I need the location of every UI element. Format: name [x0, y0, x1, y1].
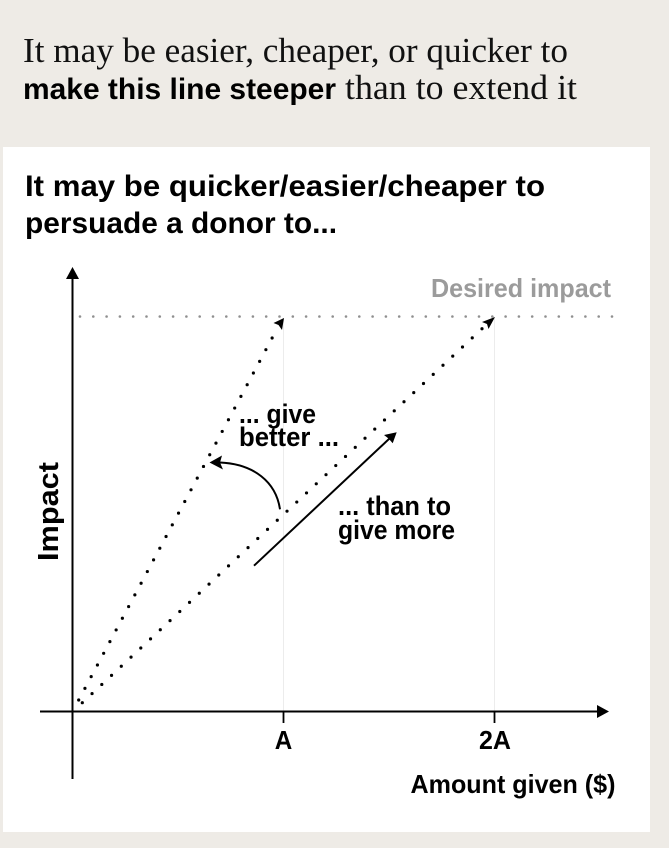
- y axis with arrow: [66, 267, 79, 779]
- arrow: give better: [210, 456, 280, 509]
- tick label 2A: 2A: [479, 725, 511, 755]
- label: than to give more: [338, 491, 455, 545]
- shallow dotted line: [82, 317, 495, 703]
- y axis label: Impact: [33, 462, 65, 561]
- chart heading: [25, 170, 545, 240]
- desired impact label: Desired impact: [431, 273, 611, 303]
- title: than to extend it: [345, 68, 577, 107]
- label: than to give more: give more: [338, 515, 455, 545]
- label: give better: [239, 399, 339, 452]
- arrow: give more: [254, 432, 397, 566]
- reference lines at A and 2A: [284, 318, 494, 711]
- chart heading: It may be quicker/easier/cheaper to: [25, 170, 545, 203]
- x axis with arrow: [40, 705, 609, 723]
- panel: chart card: [3, 147, 650, 832]
- desired impact dotted line: [80, 315, 615, 318]
- title: [23, 31, 577, 107]
- title: make this line steeper: [23, 73, 336, 106]
- title: It may be easier, cheaper, or quicker to: [23, 31, 568, 70]
- chart heading: persuade a donor to...: [25, 207, 337, 240]
- tick label A: A: [275, 725, 292, 755]
- label: give better: ... give: [239, 399, 316, 429]
- x axis label: Amount given ($): [410, 769, 616, 799]
- steep dotted line: [79, 318, 284, 700]
- label: than to give more: ... than to: [338, 491, 451, 521]
- label: give better: better ...: [239, 422, 339, 452]
